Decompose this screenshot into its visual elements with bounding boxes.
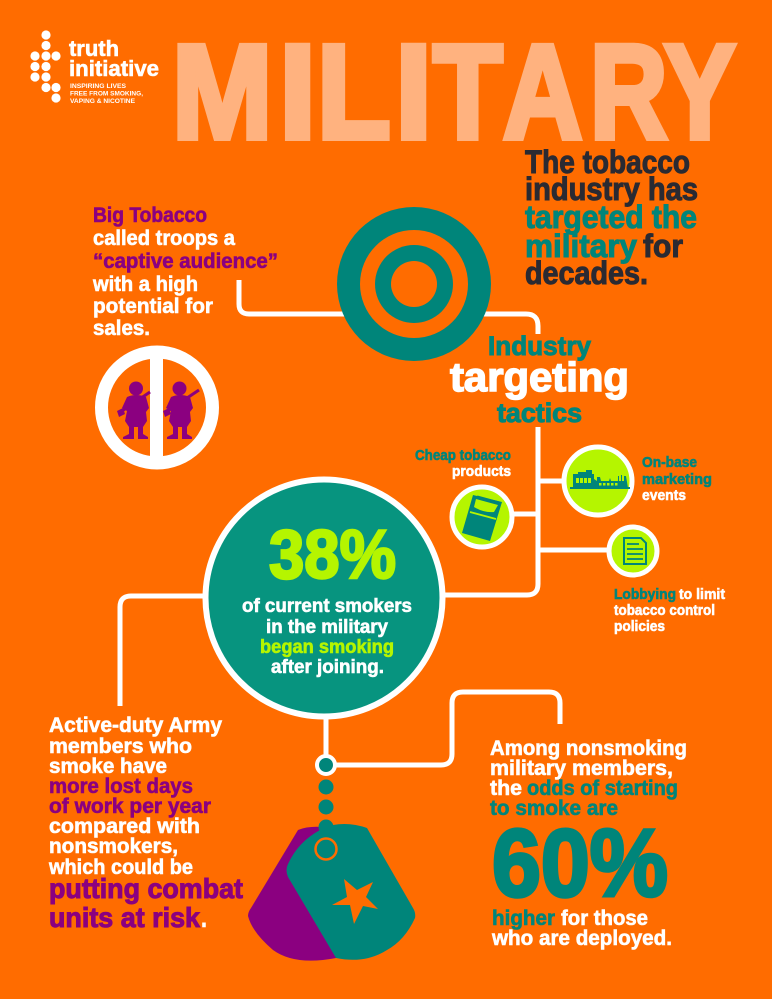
text: active-duty Army lost days: of work per year [49,795,211,818]
icon: ship [564,447,632,515]
label: lobbying: policies [614,618,665,635]
headline: tobacco industry targeted the military: decades. [525,255,648,291]
text: active-duty Army lost days: units at risk [49,902,200,933]
text: Big Tobacco captive audience: with a high [92,273,198,296]
stat caption [242,596,412,678]
heading: Industry targeting tactics: tactics [497,398,582,428]
text: Big Tobacco captive audience [92,204,278,340]
title: I [279,18,316,167]
panel: 38% stat circle [206,480,442,716]
label: cheap tobacco products: Cheap tobacco [415,447,511,464]
soldier right [163,382,199,439]
headline: tobacco industry targeted the military [525,144,698,291]
heading: Industry targeting tactics: targeting [450,354,629,400]
label: lobbying: Lobbying [614,586,676,603]
text: nonsmoking odds [490,737,687,820]
stat: 38%: 38% [269,516,396,593]
icon: target [337,207,491,361]
icon: policy document [609,527,657,575]
headline: tobacco industry targeted the military: industry has [525,171,698,207]
logo wordmark: INSPIRING LIVES [70,83,126,90]
text: nonsmoking odds: the [490,777,522,800]
label: lobbying: to limit [679,586,725,603]
title: L [317,18,391,167]
text: active-duty Army lost days: more lost days [49,775,193,798]
tag hole [316,838,336,860]
connector lines [120,280,610,765]
text: Big Tobacco captive audience: called troops a [93,227,235,250]
soldier left [117,382,150,439]
title: R [590,17,667,167]
label: lobbying [614,586,725,635]
text: higher for deployed: for those [561,907,648,930]
text: active-duty Army lost days: which could be [48,856,193,879]
icon: soldiers in divided circle [102,346,212,469]
icon: cigarette pack [452,487,512,547]
label: lobbying: tobacco control [614,602,715,619]
heading: Industry targeting tactics [450,331,629,428]
stat caption: began smoking [260,637,394,658]
title [172,17,736,167]
chain [317,756,335,774]
label: on-base marketing events: On-base [642,454,697,471]
text: active-duty Army lost days: members who [49,735,192,758]
text: Big Tobacco captive audience: sales. [93,317,150,340]
title: M [172,18,272,167]
label: cheap tobacco products [415,447,511,480]
logo wordmark: truth [69,36,119,61]
label: on-base marketing events: events [642,487,686,504]
label: cheap tobacco products: products [452,463,511,480]
text: higher for deployed [491,907,672,950]
headline: tobacco industry targeted the military: military [525,228,637,264]
title: T [433,17,503,167]
logo wordmark [69,36,159,105]
front tag [286,824,415,960]
text: Big Tobacco captive audience: Big Tobacco [93,204,207,227]
logo: truth initiative [30,30,159,105]
logo wordmark: initiative [69,56,159,81]
text: Big Tobacco captive audience: “captive audience” [93,250,278,273]
logo dot mark [30,30,61,103]
title: Y [664,17,736,167]
text: Big Tobacco captive audience: potential for [93,295,213,318]
text: active-duty Army lost days: . [201,902,207,933]
stat: 60%: 60% [492,810,668,917]
headline: tobacco industry targeted the military: The tobacco [525,144,690,180]
title: I [395,18,432,167]
text: nonsmoking odds: Among nonsmoking [490,737,687,760]
text: active-duty Army lost days: smoke have [49,755,167,778]
label: on-base marketing events: marketing [642,471,712,488]
stat caption: in the military [266,617,388,638]
heading: Industry targeting tactics: Industry [488,331,591,361]
text: nonsmoking odds: to smoke are [490,797,618,820]
text: higher for deployed: higher [492,907,555,930]
text: active-duty Army lost days: Active-duty Army [49,714,222,737]
title: A [503,17,582,166]
back tag [248,827,336,961]
stat caption: of current smokers [242,596,412,617]
stat caption: after joining. [271,657,384,678]
text: active-duty Army lost days: compared with [49,815,200,838]
headline: tobacco industry targeted the military: targeted the [525,199,697,235]
headline: tobacco industry targeted the military: for [643,228,683,264]
text: active-duty Army lost days [48,714,243,933]
logo wordmark: FREE FROM SMOKING, [70,90,143,98]
label: on-base marketing events [642,454,712,504]
text: nonsmoking odds: odds of starting [527,777,678,800]
text: higher for deployed: who are deployed. [491,927,672,950]
star [332,879,378,924]
text: nonsmoking odds: military members, [490,757,673,780]
text: active-duty Army lost days: putting combat [49,873,243,904]
logo wordmark: VAPING & NICOTINE [70,98,135,105]
icon: dog tags with chain [248,756,415,961]
text: active-duty Army lost days: nonsmokers, [49,835,178,858]
